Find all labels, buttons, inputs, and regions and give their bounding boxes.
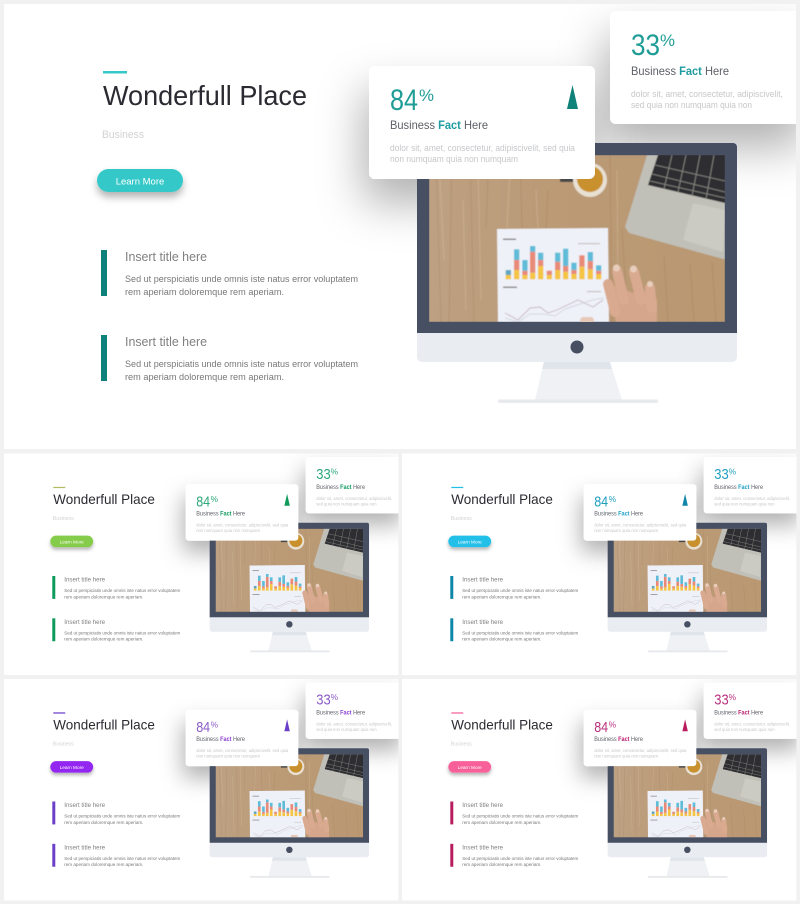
card: 84 percent xyxy=(390,85,595,179)
card: 84 percent xyxy=(196,494,298,541)
card: 84 percent: non numquam quia non numquam xyxy=(196,754,260,759)
card: 33 percent xyxy=(306,682,405,739)
card: 33 percent: sed quia non numquam quia non xyxy=(714,727,775,732)
text block 1 xyxy=(450,802,578,826)
card: 33 percent: 33 xyxy=(714,466,729,483)
card: 84 percent: Business Fact Here xyxy=(196,512,246,518)
text block 2 xyxy=(450,618,578,643)
card: 33 percent: 33 xyxy=(714,691,729,708)
button: learn more xyxy=(448,761,491,773)
card: 84 percent: 84 xyxy=(196,719,210,736)
card: 33 percent: % xyxy=(729,466,737,476)
text block 1 xyxy=(450,576,578,600)
text block 2: Sed ut perspiciatis unde omnis iste natus error voluptatem xyxy=(462,856,578,862)
text block 2 xyxy=(450,844,578,868)
text block 2: Sed ut perspiciatis unde omnis iste natus error voluptatem xyxy=(462,630,578,636)
card: 84 percent: dolor sit, amet, consectetur, adipiscivelit, sed quia xyxy=(594,523,687,528)
text block 1: Sed ut perspiciatis unde omnis iste natus error voluptatem xyxy=(64,813,180,819)
card: 33 percent: % xyxy=(660,31,675,50)
text block 2: Insert title here xyxy=(462,844,504,851)
accent line xyxy=(53,487,65,488)
card: 84 percent: non numquam quia non numquam xyxy=(196,528,260,533)
card: 33 percent xyxy=(704,682,800,739)
card shadows xyxy=(186,682,405,766)
monitor with desk photo xyxy=(210,748,369,878)
text block 1 xyxy=(101,250,358,298)
card: 33 percent: Business Fact Here xyxy=(714,710,764,716)
monitor with desk photo xyxy=(417,143,737,403)
card: 33 percent: sed quia non numquam quia non xyxy=(316,727,377,732)
card: 84 percent: dolor sit, amet, consectetur, adipiscivelit, sed quia xyxy=(390,143,576,153)
card: 84 percent: % xyxy=(609,719,617,729)
accent line xyxy=(103,71,127,74)
button: learn more: Learn More xyxy=(458,765,482,771)
card: 33 percent xyxy=(306,468,392,514)
text block 1: Sed ut perspiciatis unde omnis iste natus error voluptatem xyxy=(64,588,180,594)
text block 2 xyxy=(101,335,358,383)
card: 33 percent: Business Fact Here xyxy=(714,485,764,491)
card: 84 percent: % xyxy=(211,719,219,729)
card: 33 percent: dolor sit, amet, consectetur, adipiscivelit, xyxy=(316,721,392,726)
text block 1: rem aperiam doloremque rem aperiam. xyxy=(125,287,284,298)
title: Wonderfull Place xyxy=(103,80,307,111)
accent line xyxy=(53,712,65,714)
card: 84 percent: non numquam quia non numquam xyxy=(594,754,658,759)
text block 2: Insert title here xyxy=(64,844,106,851)
text block 1: Insert title here xyxy=(462,576,504,583)
accent line xyxy=(451,487,463,488)
text block 2: Insert title here xyxy=(462,619,504,626)
card: 33 percent: 33 xyxy=(631,29,660,62)
text block 1: Sed ut perspiciatis unde omnis iste natus error voluptatem xyxy=(462,588,578,594)
text block 1: rem aperiam doloremque rem aperiam. xyxy=(64,820,143,826)
card: 84 percent: 84 xyxy=(594,719,608,736)
card: 84 percent: Business Fact Here xyxy=(594,512,644,518)
panel: main slide teal xyxy=(4,4,800,449)
card: 33 percent: Business Fact Here xyxy=(316,485,366,491)
text block 2: rem aperiam doloremque rem aperiam. xyxy=(64,862,143,868)
card: 33 percent: sed quia non numquam quia non xyxy=(316,501,377,506)
card: 84 percent: % xyxy=(609,494,617,504)
subtitle: Business xyxy=(451,516,472,522)
card: 84 percent: non numquam quia non numquam xyxy=(390,154,518,164)
card: 33 percent: Business Fact Here xyxy=(631,64,729,78)
text block 2 xyxy=(52,844,180,868)
card: 84 percent: Business Fact Here xyxy=(196,737,246,743)
button: learn more xyxy=(50,536,93,547)
card shadows xyxy=(584,682,800,766)
card: 84 percent: dolor sit, amet, consectetur, adipiscivelit, sed quia xyxy=(594,748,687,753)
panel: small slide green xyxy=(4,453,405,675)
text block 1: Insert title here xyxy=(64,576,106,583)
panel: small slide purple xyxy=(4,679,405,901)
card: 84 percent: 84 xyxy=(594,493,608,510)
text block 1: Sed ut perspiciatis unde omnis iste natus error voluptatem xyxy=(125,274,358,285)
monitor with desk photo xyxy=(210,523,369,652)
card: 33 percent: dolor sit, amet, consectetur, adipiscivelit, xyxy=(631,89,783,99)
card: 84 percent xyxy=(186,710,298,766)
card: 33 percent xyxy=(610,34,782,124)
card: 33 percent xyxy=(704,468,790,514)
card: 33 percent: dolor sit, amet, consectetur, adipiscivelit, xyxy=(316,496,392,501)
text block 2: Insert title here xyxy=(64,619,106,626)
button: learn more xyxy=(97,169,183,192)
card: 33 percent: dolor sit, amet, consectetur, adipiscivelit, xyxy=(714,496,790,501)
card: 84 percent: Business Fact Here xyxy=(594,737,644,743)
card: 33 percent: sed quia non numquam quia non xyxy=(714,501,775,506)
card shadows xyxy=(584,457,800,541)
text block 2: rem aperiam doloremque rem aperiam. xyxy=(64,637,143,643)
text block 2 xyxy=(52,618,180,643)
subtitle: Business xyxy=(102,129,144,141)
text block 2: rem aperiam doloremque rem aperiam. xyxy=(462,862,541,868)
text block 2: Sed ut perspiciatis unde omnis iste natus error voluptatem xyxy=(64,856,180,862)
text block 2: Sed ut perspiciatis unde omnis iste natus error voluptatem xyxy=(64,630,180,636)
card: 84 percent: dolor sit, amet, consectetur, adipiscivelit, sed quia xyxy=(196,523,289,528)
text block 1 xyxy=(52,802,180,826)
monitor with desk photo xyxy=(608,748,767,878)
card: 33 percent: % xyxy=(729,692,737,702)
card: 84 percent: dolor sit, amet, consectetur, adipiscivelit, sed quia xyxy=(196,748,289,753)
card: 84 percent: 84 xyxy=(196,493,210,510)
card: 84 percent: non numquam quia non numquam xyxy=(594,528,658,533)
card shadows xyxy=(369,11,800,179)
text block 2: Sed ut perspiciatis unde omnis iste natus error voluptatem xyxy=(125,359,358,370)
text block 1 xyxy=(52,576,180,600)
subtitle: Business xyxy=(53,742,74,748)
title: Wonderfull Place xyxy=(53,716,155,732)
text block 1: Sed ut perspiciatis unde omnis iste natus error voluptatem xyxy=(462,813,578,819)
card: 84 percent: 84 xyxy=(390,84,418,117)
title: Wonderfull Place xyxy=(451,716,553,732)
monitor with desk photo xyxy=(608,523,767,652)
title: Wonderfull Place xyxy=(53,491,155,507)
card: 33 percent: dolor sit, amet, consectetur, adipiscivelit, xyxy=(714,721,790,726)
text block 2: rem aperiam doloremque rem aperiam. xyxy=(462,637,541,643)
title: Wonderfull Place xyxy=(451,491,553,507)
text block 1: rem aperiam doloremque rem aperiam. xyxy=(462,820,541,826)
subtitle: Business xyxy=(53,516,74,522)
card: 84 percent: Business Fact Here xyxy=(390,118,488,132)
button: learn more: Learn More xyxy=(60,539,84,545)
text block 2: rem aperiam doloremque rem aperiam. xyxy=(125,372,284,383)
text block 1: rem aperiam doloremque rem aperiam. xyxy=(462,594,541,600)
card: 33 percent: 33 xyxy=(316,691,331,708)
panel: small slide blue xyxy=(402,453,800,675)
button: learn more xyxy=(448,536,491,547)
card: 33 percent: 33 xyxy=(316,466,331,483)
text block 1: Insert title here xyxy=(462,802,504,809)
button: learn more: Learn More xyxy=(60,765,84,771)
text block 1: Insert title here xyxy=(125,250,207,264)
button: learn more: Learn More xyxy=(116,176,164,188)
card: 33 percent: % xyxy=(331,692,339,702)
card: 33 percent: sed quia non numquam quia non xyxy=(631,100,752,110)
button: learn more: Learn More xyxy=(458,539,482,545)
card: 33 percent: Business Fact Here xyxy=(316,710,366,716)
card: 33 percent: % xyxy=(331,466,339,476)
card: 84 percent xyxy=(594,494,696,541)
card shadows xyxy=(186,457,405,541)
subtitle: Business xyxy=(451,742,472,748)
text block 1: Insert title here xyxy=(64,802,106,809)
panel: small slide pink xyxy=(402,679,800,901)
accent line xyxy=(451,712,463,714)
button: learn more xyxy=(50,761,93,773)
text block 2: Insert title here xyxy=(125,335,207,349)
text block 1: rem aperiam doloremque rem aperiam. xyxy=(64,594,143,600)
card: 84 percent: % xyxy=(211,494,219,504)
card: 84 percent xyxy=(584,710,696,766)
card: 84 percent: % xyxy=(419,86,434,105)
